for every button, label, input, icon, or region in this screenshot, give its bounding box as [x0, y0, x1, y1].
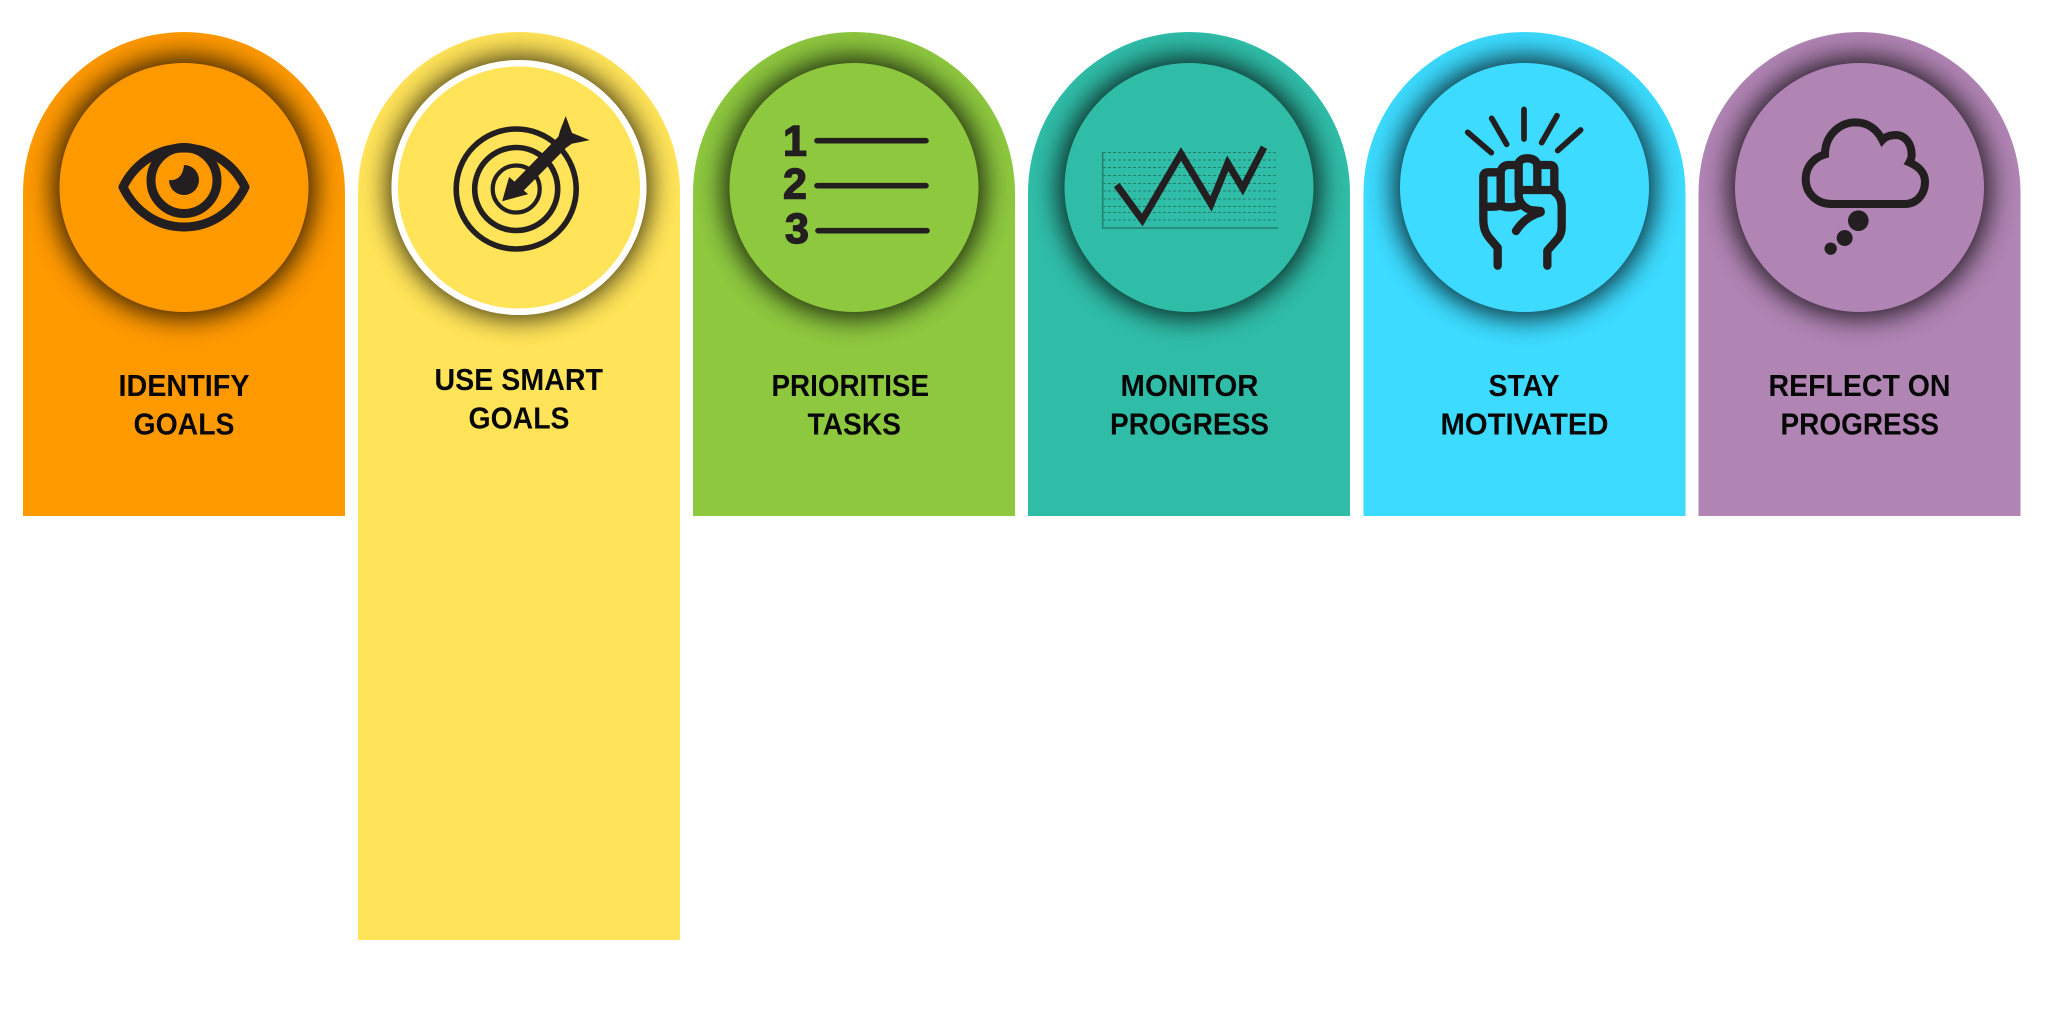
card shape: [358, 32, 680, 940]
icon: numbered list: 2: [783, 160, 807, 208]
label: identify goals: GOALS: [134, 406, 234, 441]
card shape: [1364, 32, 1686, 516]
panel: identify goals: [23, 32, 345, 516]
label: use smart goals: GOALS: [468, 400, 570, 435]
panel: use smart goals: [358, 32, 680, 940]
label: stay motivated: STAY: [1488, 368, 1560, 403]
circle shadow: [1058, 56, 1320, 318]
panel: monitor progress: [1028, 32, 1350, 516]
circle: [730, 63, 978, 312]
card shape: [693, 32, 1015, 516]
circle shadow: [1728, 56, 1990, 318]
label: monitor progress: MONITOR: [1120, 368, 1258, 403]
circle shadow: [723, 56, 985, 318]
label: identify goals: IDENTIFY: [118, 368, 250, 403]
icon: numbered list: [783, 118, 927, 253]
circle: [1064, 63, 1314, 312]
panel: stay motivated: [1364, 32, 1686, 516]
icon: line chart: [1103, 147, 1278, 228]
label: reflect on progress: REFLECT ON: [1768, 368, 1950, 403]
panel: prioritise tasks: [693, 32, 1015, 516]
label: stay motivated: MOTIVATED: [1440, 406, 1608, 441]
icon: eye: [123, 148, 245, 227]
circle shadow: [53, 56, 315, 318]
label: reflect on progress: PROGRESS: [1780, 406, 1939, 441]
circle: [1735, 63, 1984, 312]
circle: [60, 63, 308, 312]
card shape: [1698, 32, 2020, 516]
label: identify goals: [118, 368, 250, 441]
circle shadow: [388, 56, 650, 318]
label: stay motivated: [1440, 368, 1608, 441]
label: prioritise tasks: TASKS: [808, 406, 901, 441]
icon: numbered list: 1: [783, 118, 807, 166]
icon: target and arrow: [456, 117, 588, 249]
circle with white ring: [395, 63, 643, 312]
icon: raised fist: [1468, 109, 1581, 266]
label: use smart goals: USE SMART: [434, 362, 603, 397]
card shape: [1028, 32, 1350, 516]
icon: numbered list: 3: [785, 205, 809, 253]
label: monitor progress: [1110, 368, 1269, 441]
circle shadow: [1394, 56, 1656, 318]
label: reflect on progress: [1768, 368, 1950, 441]
panel: reflect on progress: [1698, 32, 2020, 516]
card shape: [23, 32, 345, 516]
label: prioritise tasks: [772, 368, 929, 441]
icon: thought cloud: [1806, 122, 1925, 255]
label: use smart goals: [434, 362, 603, 435]
label: monitor progress: PROGRESS: [1110, 406, 1269, 441]
circle: [1400, 63, 1649, 312]
label: prioritise tasks: PRIORITISE: [772, 368, 929, 403]
